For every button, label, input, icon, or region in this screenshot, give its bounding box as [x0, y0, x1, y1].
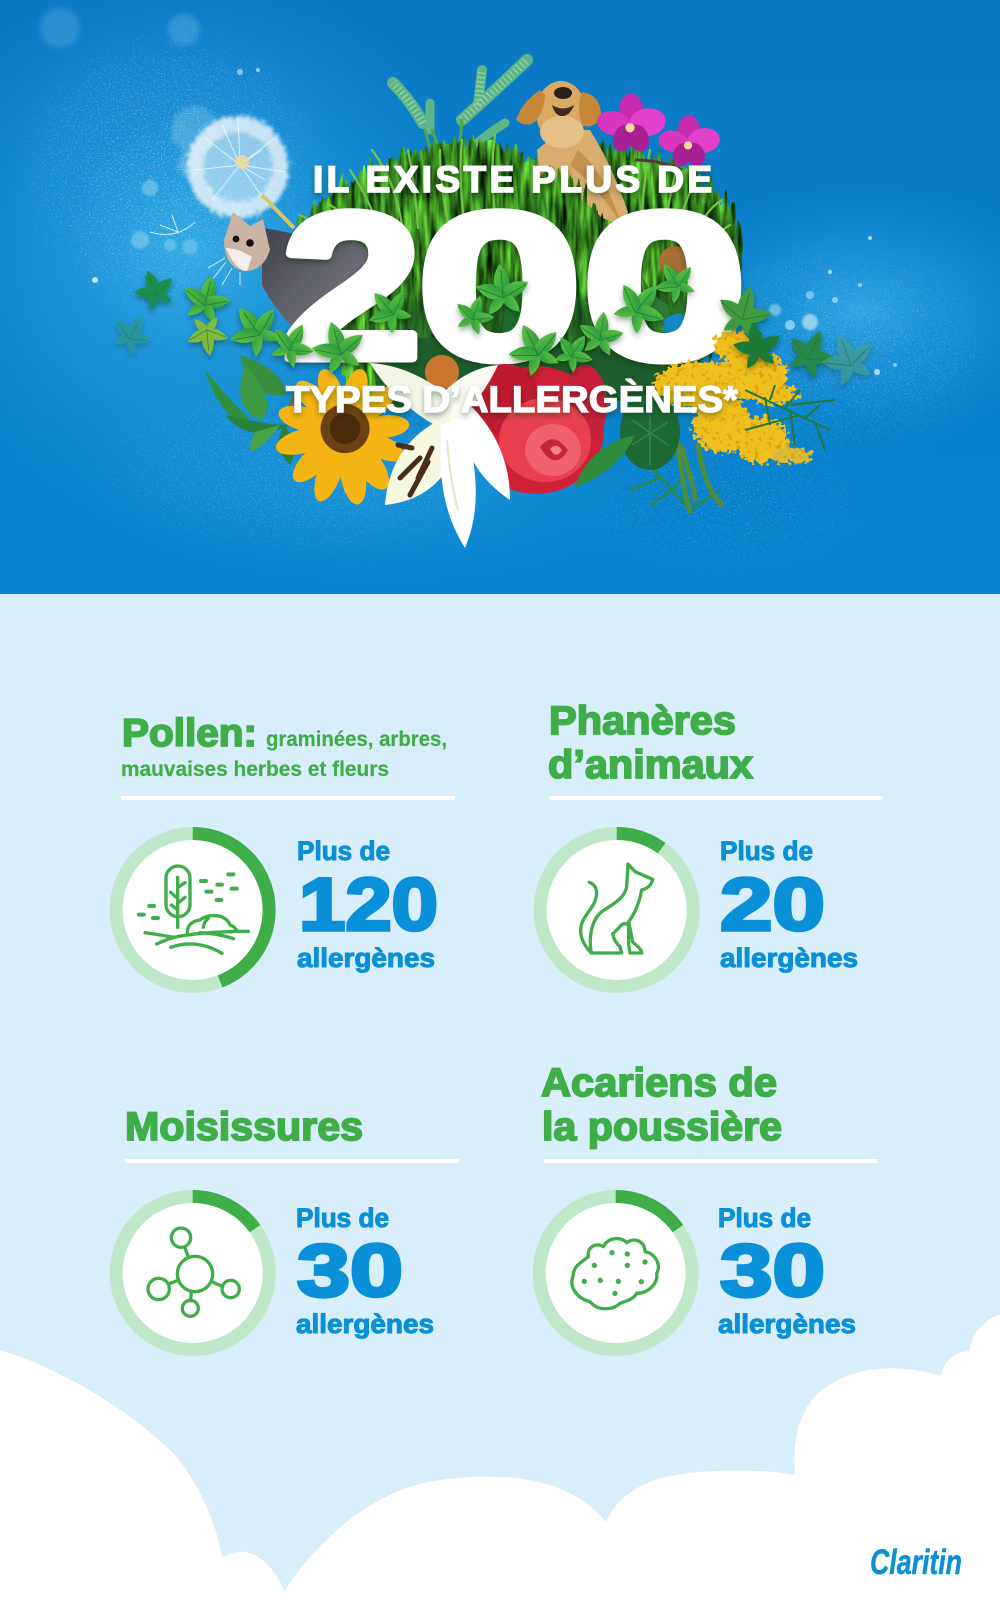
illustration: orchids: [595, 94, 722, 170]
heading: pollen: Pollen:: [122, 712, 257, 755]
illustration: lower left leaves: [205, 355, 295, 465]
stat: plus de 30 allergènes: [718, 1203, 856, 1339]
heading: phanères d'animaux: d’animaux: [548, 743, 753, 787]
icon: lily: [370, 355, 510, 548]
stat: plus de 30 allergènes: Plus de: [296, 1203, 389, 1233]
icon: dandelion: [150, 106, 294, 234]
stat: plus de 30 allergènes: Plus de: [718, 1203, 811, 1233]
logo: claritin: Claritin: [870, 1543, 962, 1582]
donut: pollen 120: [110, 827, 276, 993]
heading: types d'allergènes: TYPES D’ALLERGÈNES*: [286, 379, 739, 420]
bokeh lights: [40, 8, 897, 375]
big number 200: 2: [281, 171, 422, 403]
stat: plus de 120 allergènes: 120: [299, 863, 438, 946]
stat: plus de 30 allergènes: 30: [297, 1229, 403, 1312]
heading: acariens de la poussière: [541, 1061, 782, 1149]
panel: pollen: [110, 712, 455, 993]
icon: sunflower: [273, 366, 410, 507]
illustration: dog: [515, 81, 628, 232]
donut: mold 30: [110, 1190, 276, 1356]
big number 200: 0: [417, 171, 582, 403]
illustration: fern and foliage lower right: [574, 385, 835, 512]
illustration: rose: [468, 364, 607, 494]
stat: plus de 20 allergènes: Plus de: [720, 836, 813, 866]
icon: dust cloud: [572, 1239, 658, 1309]
panel: phanères d'animaux: [534, 699, 883, 993]
stat: plus de 30 allergènes: allergènes: [718, 1309, 856, 1339]
stat: plus de 120 allergènes: [297, 836, 438, 973]
heading: il existe plus de: IL EXISTE PLUS DE: [313, 159, 712, 200]
illustration: mimosa: [654, 331, 812, 464]
panel: moisissures: [110, 1105, 459, 1356]
panel: hero banner: [0, 0, 1000, 594]
big number 200: 0: [582, 171, 747, 403]
big number 200: [281, 171, 747, 403]
icon: tree and pollen: [139, 866, 248, 953]
clouds: [0, 1315, 1000, 1613]
hero background: [0, 0, 1000, 594]
panel: acariens de la poussière: [533, 1061, 878, 1356]
stat: plus de 20 allergènes: 20: [720, 863, 825, 946]
heading: acariens de la poussière: Acariens de: [541, 1061, 777, 1105]
heading: pollen: [121, 712, 447, 781]
icon: dog: [581, 864, 653, 953]
stat: plus de 30 allergènes: 30: [720, 1229, 825, 1312]
heading: moisissures: Moisissures: [125, 1105, 363, 1149]
donut: animals 20: [534, 827, 700, 993]
illustration: fern spikes: [393, 60, 527, 190]
stat: plus de 30 allergènes: allergènes: [296, 1309, 434, 1339]
illustration: dark foliage behind number: [370, 330, 700, 410]
stat: plus de 30 allergènes: [296, 1203, 434, 1339]
stat: plus de 20 allergènes: allergènes: [720, 943, 858, 973]
donut: dust mites 30: [533, 1190, 699, 1356]
heading: pollen: graminées, arbres,: [266, 728, 447, 751]
heading: phanères d'animaux: Phanères: [549, 699, 736, 743]
icon: mold spores: [148, 1228, 239, 1316]
stat: plus de 120 allergènes: allergènes: [297, 943, 435, 973]
stat: plus de 20 allergènes: [720, 836, 858, 973]
heading: phanères d'animaux: [548, 699, 753, 787]
heading: pollen: mauvaises herbes et fleurs: [121, 758, 389, 781]
leaves over number: [103, 252, 885, 393]
stat: plus de 120 allergènes: Plus de: [297, 836, 390, 866]
heading: acariens de la poussière: la poussière: [542, 1105, 782, 1149]
illustration: cat: [208, 212, 372, 338]
illustration: grass mound: [296, 135, 741, 395]
